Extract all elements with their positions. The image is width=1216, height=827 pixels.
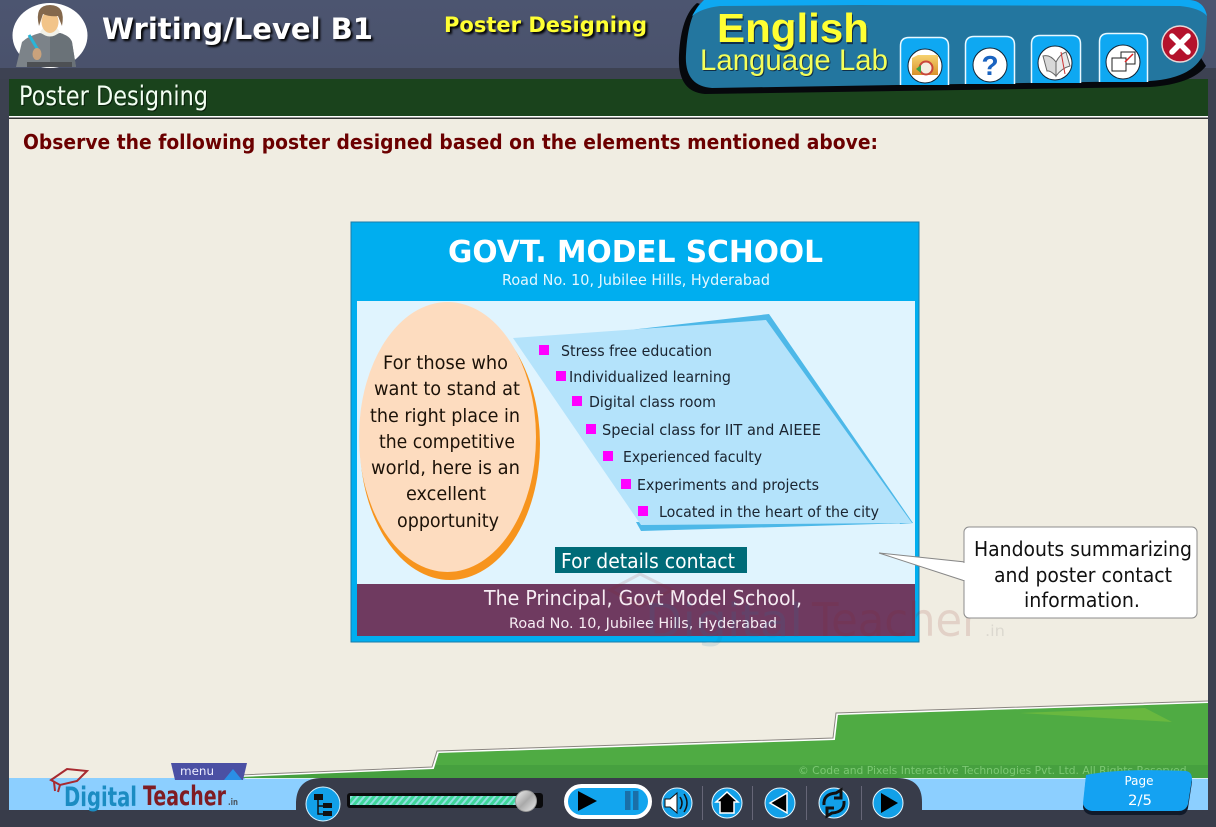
watermark logo: Teacher [811, 593, 980, 647]
menu tab: menu [180, 764, 214, 778]
tab icon: help: ? [981, 50, 999, 81]
feature 5: Experienced faculty [623, 448, 762, 466]
icon: graduation cap [51, 769, 87, 792]
Digital Teacher logo: .in [228, 798, 238, 808]
callout: Handouts summarizing [974, 537, 1192, 561]
title: Writing/Level B1: Writing/Level B1 [102, 12, 373, 46]
page counter: Page [1124, 774, 1154, 788]
header band [0, 0, 1216, 79]
icon: speaker [662, 788, 692, 818]
oval with message [359, 302, 540, 580]
close button [1162, 26, 1198, 62]
page counter [1083, 770, 1192, 815]
tab icon: help [965, 36, 1015, 84]
callout: and poster contact [994, 563, 1172, 587]
parallelogram list of features [513, 314, 913, 531]
Digital Teacher logo: Digital [64, 782, 137, 813]
contact strip [357, 584, 915, 636]
Language Lab wordmark: Language Lab [700, 44, 888, 77]
feature 2: Individualized learning [569, 368, 731, 386]
English wordmark: English [717, 5, 869, 51]
poster [351, 222, 919, 642]
icon: refresh [806, 786, 849, 820]
content area [9, 119, 1208, 779]
oval with message: opportunity [397, 510, 499, 532]
contact strip: The Principal, Govt Model School, [483, 586, 802, 610]
topic: Poster Designing: Poster Designing [444, 13, 647, 37]
footer strip [0, 778, 1216, 827]
play and pause pill [566, 786, 650, 817]
watermark logo: Digital [645, 594, 803, 648]
progress slider [347, 790, 543, 812]
oval with message: the competitive [379, 431, 515, 453]
for details contact label: For details contact [561, 549, 735, 573]
control bar [296, 778, 922, 810]
feature 4: Special class for IIT and AIEEE [602, 421, 821, 439]
Digital Teacher logo [51, 769, 238, 813]
icon: next [861, 786, 903, 820]
instruction text: Observe the following poster designed based on the elements mentioned above: [23, 130, 878, 154]
English Language Lab panel [679, 0, 1207, 94]
Digital Teacher logo: Teacher [143, 781, 226, 812]
tab icon: bookmark folder [900, 37, 949, 85]
watermark logo: .in [985, 622, 1005, 640]
poster body [357, 301, 915, 584]
page counter: 2/5 [1128, 793, 1152, 809]
tab icon: open book [1031, 35, 1081, 83]
feature 1: Stress free education [561, 342, 712, 360]
contact strip: Road No. 10, Jubilee Hills, Hyderabad [509, 616, 777, 632]
oval with message: world, here is an [371, 457, 520, 479]
oval with message: want to stand at [374, 378, 520, 400]
avatar: student writing [12, 3, 88, 68]
section heading bar: Poster Designing [19, 81, 208, 112]
feature 7: Located in the heart of the city [659, 503, 879, 521]
poster title: GOVT. MODEL SCHOOL [448, 235, 823, 270]
tab icon: windows [1099, 33, 1148, 82]
icon: tree menu [306, 787, 340, 821]
oval with message: excellent [406, 483, 486, 505]
callout [879, 527, 1197, 618]
watermark logo [610, 574, 1005, 648]
icon: home [702, 786, 742, 820]
oval with message: For those who [383, 352, 508, 374]
footer landscape: green hill [215, 701, 1208, 778]
feature 3: Digital class room [589, 393, 716, 411]
menu tab [171, 763, 247, 780]
section heading bar [9, 79, 1208, 119]
icon: back [752, 786, 795, 820]
copyright notice: © Code and Pixels Interactive Technologies Pvt. Ltd. All Rights Reserved. [798, 765, 1190, 777]
oval with message: the right place in [370, 405, 520, 427]
callout: information. [1024, 588, 1140, 612]
feature 6: Experiments and projects [637, 476, 819, 494]
poster address: Road No. 10, Jubilee Hills, Hyderabad [502, 271, 770, 289]
